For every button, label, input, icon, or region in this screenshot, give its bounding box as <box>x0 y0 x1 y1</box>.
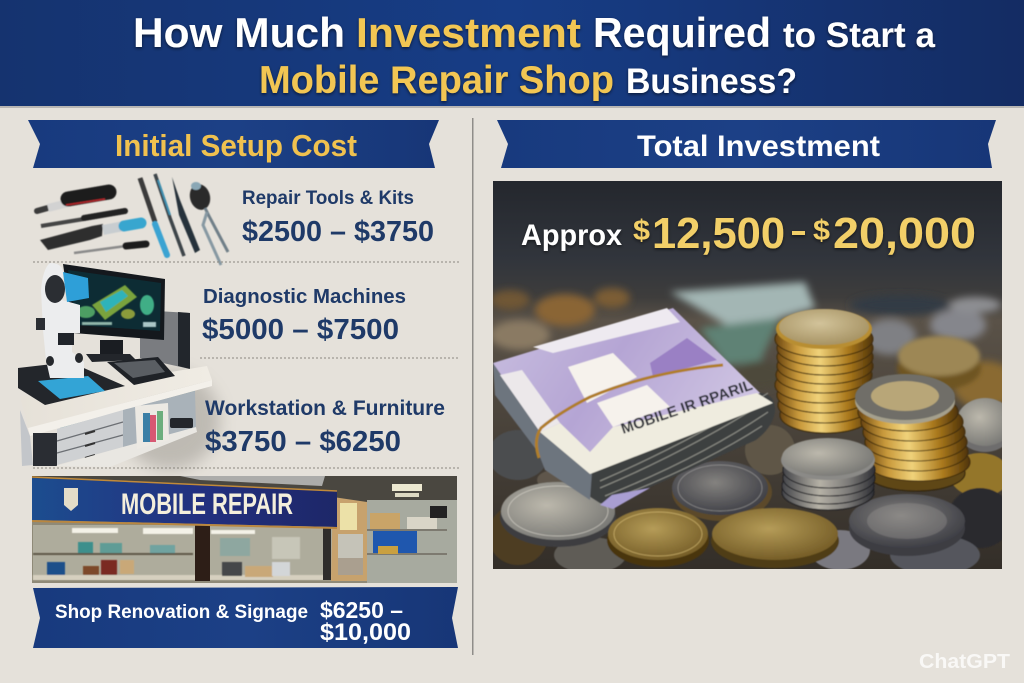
keyboard <box>107 357 175 385</box>
sign text: MOBILE REPAIR <box>121 488 293 521</box>
ribbon: shop renovation and signage <box>33 587 458 648</box>
title: Required <box>593 9 771 56</box>
note pages <box>590 392 775 504</box>
panel: initial setup cost <box>18 120 460 648</box>
bundle label: MOBILE IR RPARIL <box>619 377 755 438</box>
microscope <box>41 263 84 378</box>
fascia sign <box>32 478 337 527</box>
item: workstation and furniture: $3750 – $6250 <box>205 426 401 458</box>
item: diagnostic machines: Diagnostic Machines <box>203 285 406 308</box>
watermark: ChatGPT <box>919 651 1010 673</box>
title <box>133 9 936 102</box>
large silver coin <box>500 512 616 548</box>
dark coin right <box>849 526 965 556</box>
background coin stacks <box>897 336 981 390</box>
wood shelving <box>331 497 367 581</box>
tablet base <box>18 362 125 405</box>
heading ribbon: initial setup cost <box>28 120 439 168</box>
icon: diagnostic workstation <box>18 263 220 470</box>
item: diagnostic machines: $5000 – $7500 <box>202 314 399 346</box>
cabinet leg <box>20 410 33 466</box>
cash bundle <box>493 308 775 509</box>
title: Investment <box>356 9 581 56</box>
icon: shop logo <box>64 488 78 511</box>
top face <box>493 308 760 452</box>
drawers <box>57 410 123 465</box>
item: repair tools and kits: Repair Tools & Kits <box>242 187 414 209</box>
ribbon: shop renovation and signage: $10,000 <box>320 619 411 646</box>
total amount: Approx <box>521 219 622 252</box>
centre divider <box>472 118 474 655</box>
item: workstation and furniture <box>205 396 445 458</box>
pillars <box>195 525 210 581</box>
watermark blocks <box>568 353 637 403</box>
panel: total investment <box>488 120 1017 575</box>
blurred background coins <box>490 282 1017 409</box>
image: cash and coins <box>488 181 1017 575</box>
window interior <box>33 525 333 580</box>
item: repair tools and kits: $2500 – $3750 <box>242 216 434 248</box>
image: mobile repair shopfront <box>32 476 457 583</box>
desk top and front <box>20 366 212 428</box>
desk shadow <box>120 370 220 470</box>
title: Business? <box>626 62 797 101</box>
top white strip <box>533 308 680 353</box>
title: Mobile Repair Shop <box>259 59 614 102</box>
shelf <box>123 391 196 447</box>
gold coin large <box>710 536 840 568</box>
icon: repair tools <box>37 174 228 265</box>
title: to Start a <box>783 16 936 55</box>
heading ribbon: total investment: Total Investment <box>637 130 880 163</box>
gold coin left <box>606 536 710 568</box>
pc tower <box>140 310 190 369</box>
monitor <box>63 264 165 340</box>
rubber band <box>536 365 723 458</box>
coin stack: right gold <box>855 374 970 491</box>
heading ribbon: initial setup cost: Initial Setup Cost <box>115 128 357 163</box>
total amount: $ <box>813 215 830 247</box>
white fold band <box>540 393 773 474</box>
interior right <box>367 500 457 583</box>
lower coins <box>488 398 1015 575</box>
header band <box>0 0 1024 108</box>
item: diagnostic machines <box>202 285 406 346</box>
total amount: 20,000 <box>833 209 976 258</box>
ribbon: shop renovation and signage: $6250 – <box>320 597 403 623</box>
coin stack: tall gold <box>775 309 873 433</box>
item: repair tools and kits <box>242 187 434 248</box>
ribbon: shop renovation and signage: Shop Renovation & Signage <box>55 601 308 623</box>
total amount: 12,500 <box>652 209 785 258</box>
ceiling <box>32 476 457 502</box>
total amount <box>521 209 976 258</box>
heading ribbon: total investment <box>497 120 996 168</box>
title: How Much <box>133 9 345 56</box>
left stack edge <box>493 363 592 500</box>
total amount: $ <box>633 215 650 247</box>
dark silver coin <box>672 476 772 522</box>
coin stack: silver <box>781 438 875 510</box>
item: workstation and furniture: Workstation & Furniture <box>205 396 445 420</box>
